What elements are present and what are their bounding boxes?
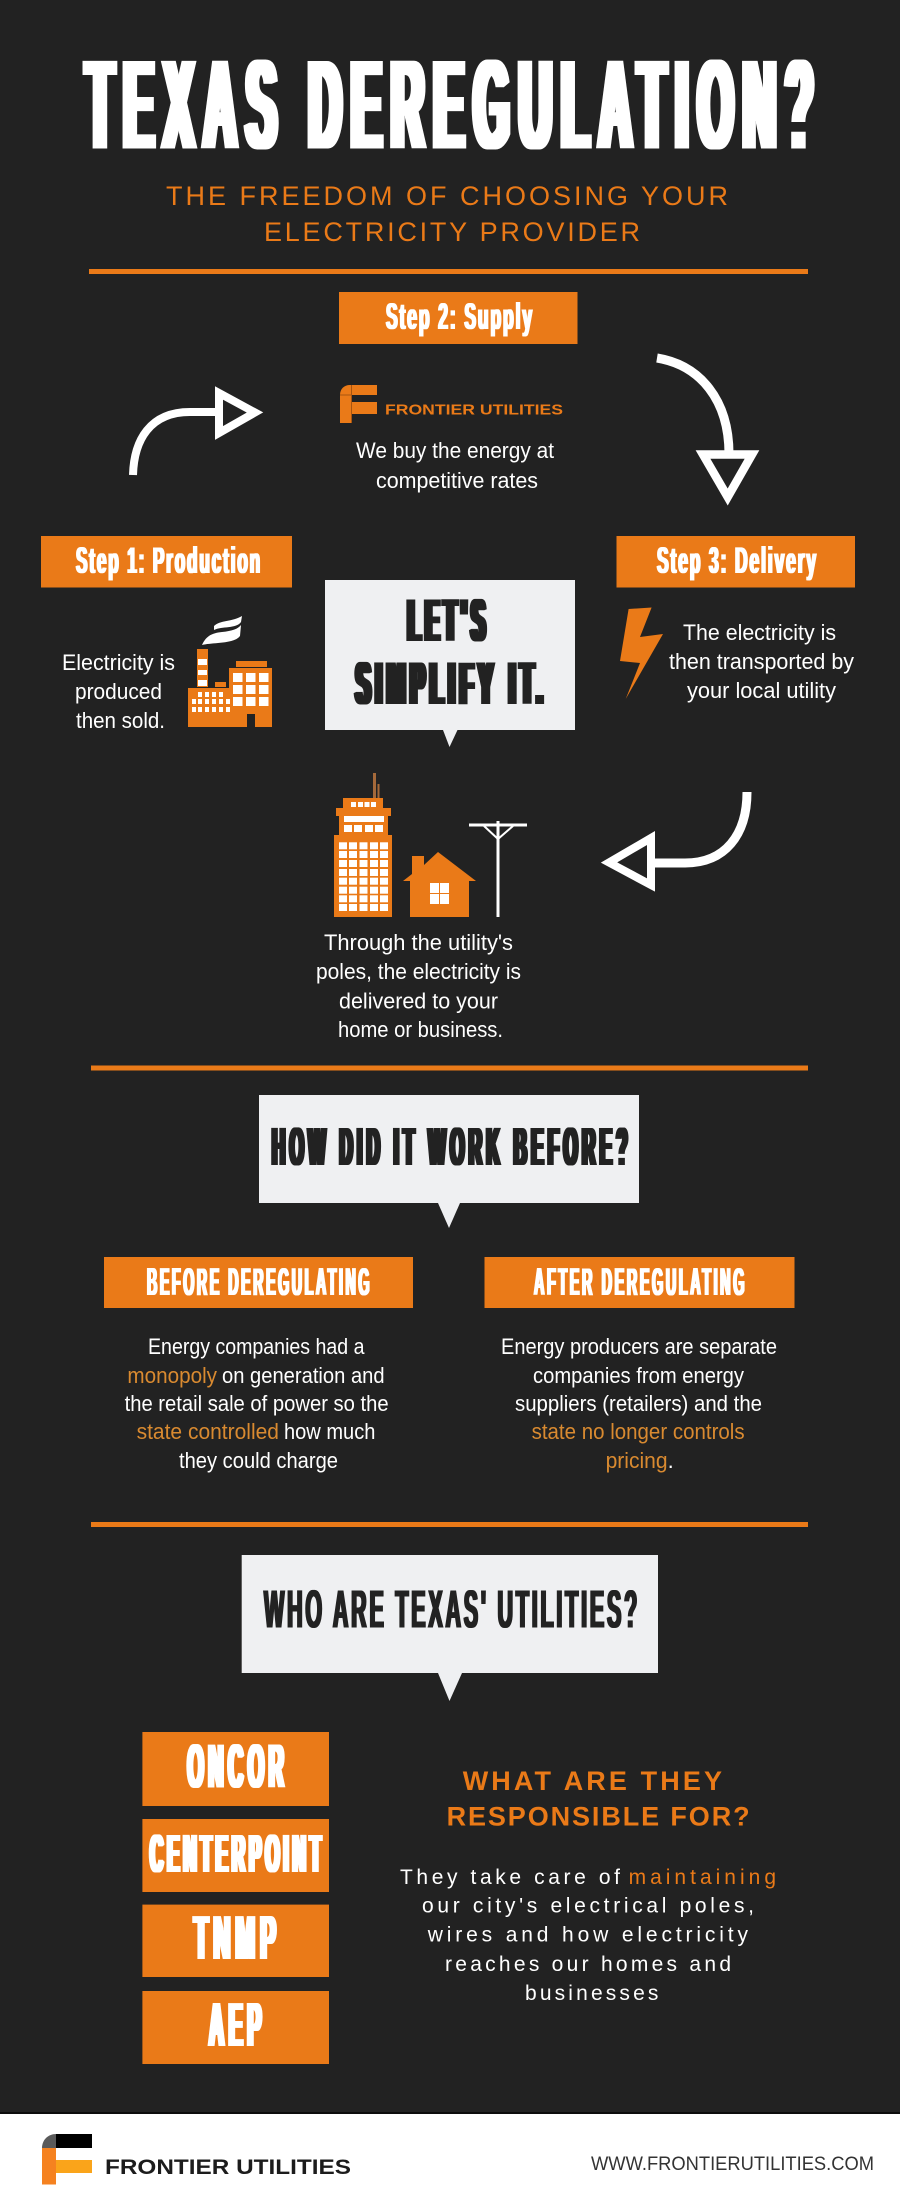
- step 2 text: We buy the energy at: [356, 438, 554, 463]
- before text: how much: [284, 1419, 375, 1444]
- callout: who are texas' utilities: [242, 1555, 658, 1701]
- responsibilities text: [400, 1866, 776, 2005]
- before text: state controlled: [137, 1419, 279, 1444]
- panel: before deregulating: [104, 1257, 413, 1473]
- centerpoint: [142, 1819, 329, 1892]
- step 2 panel: supply: [339, 292, 578, 493]
- subtitle: [166, 181, 728, 247]
- step 1 panel: production: [41, 536, 292, 733]
- step 2 label: Step 2: Supply: [386, 296, 534, 337]
- callout: how did it work before: [259, 1095, 639, 1228]
- before text: they could charge: [179, 1448, 338, 1473]
- heading: what are they responsible for: RESPONSIBLE FOR?: [447, 1802, 750, 1832]
- step 3 text: your local utility: [687, 678, 836, 703]
- arrow: production to supply: [133, 393, 255, 475]
- step 2 label: [339, 292, 578, 344]
- footer brand name: FRONTIER UTILITIES: [105, 2156, 351, 2179]
- after heading: [484, 1257, 794, 1308]
- aep: [142, 1991, 329, 2064]
- heading: what are they responsible for: WHAT ARE THEY: [463, 1766, 722, 1796]
- step 3 label: [616, 536, 855, 588]
- text: CENTERPOINT: [150, 1824, 325, 1884]
- step 3 text: then transported by: [669, 649, 854, 674]
- responsibilities text: wires and how electricity: [427, 1924, 748, 1947]
- step 1 text: produced: [75, 679, 162, 704]
- delivery text: [316, 930, 521, 1042]
- footer: [0, 2112, 900, 2200]
- text: ONCOR: [188, 1732, 288, 1802]
- after text: companies from energy: [533, 1363, 744, 1388]
- step 3 text: [669, 620, 854, 703]
- footer website: WWW.FRONTIERUTILITIES.COM: [591, 2154, 874, 2175]
- step 1 text: [62, 650, 175, 733]
- icon: tower: [334, 773, 392, 917]
- icon: frontier utilities logo orange: [340, 385, 563, 423]
- callout: let's simplify it: LET'S: [408, 587, 490, 654]
- tnmp: [142, 1904, 329, 1977]
- subtitle: ELECTRICITY PROVIDER: [264, 217, 640, 247]
- delivery text: delivered to your: [339, 988, 498, 1014]
- after text: [501, 1334, 777, 1473]
- step 1 text: then sold.: [76, 708, 165, 733]
- responsibilities text: maintaining: [629, 1866, 776, 1889]
- delivery text: Through the utility's: [324, 930, 513, 955]
- icon: factory: [188, 616, 272, 727]
- callout: let's simplify it: [325, 580, 575, 747]
- step 2 text: [356, 438, 554, 493]
- icon: frontier utilities logo: [42, 2134, 92, 2184]
- responsibilities text: businesses: [525, 1982, 658, 2005]
- panel: after deregulating: [484, 1257, 794, 1473]
- heading: what are they responsible for: [447, 1766, 750, 1832]
- after text: pricing: [606, 1448, 668, 1473]
- after text: Energy producers are separate: [501, 1334, 777, 1359]
- responsibilities text: our city's electrical poles,: [422, 1895, 754, 1918]
- before text: [125, 1334, 389, 1473]
- text: SIMPLIFY IT.: [356, 650, 548, 717]
- before text: the retail sale of power so the: [125, 1391, 389, 1416]
- icon: lightning bolt: [620, 608, 663, 699]
- panel: utility names: [142, 1732, 329, 2064]
- aep: AEP: [209, 1991, 266, 2060]
- after text: .: [668, 1448, 674, 1473]
- step 2 text: competitive rates: [376, 468, 538, 493]
- responsibilities text: They take care of: [400, 1866, 620, 1889]
- text: BEFORE DEREGULATING: [147, 1261, 372, 1304]
- icon: tower, house and utility pole: [334, 773, 527, 917]
- before text: monopoly: [127, 1363, 217, 1388]
- before text: on generation and: [222, 1363, 385, 1388]
- icon: utility pole: [469, 821, 527, 917]
- arrow: supply to delivery: [657, 358, 752, 497]
- before text: Energy companies had a: [148, 1334, 365, 1359]
- oncor: [142, 1732, 329, 1806]
- before heading: [104, 1257, 413, 1308]
- arrow: delivery to home: [609, 792, 747, 885]
- delivery text: poles, the electricity is: [316, 959, 521, 984]
- step 1 label: [41, 536, 292, 588]
- step 1 text: Electricity is: [62, 650, 175, 675]
- step 1 label: Step 1: Production: [76, 540, 262, 581]
- icon: house: [403, 852, 476, 917]
- after text: state no longer controls: [532, 1419, 745, 1444]
- delivery text: home or business.: [338, 1017, 503, 1042]
- step 3 panel: delivery: [616, 536, 855, 703]
- icon: frontier utilities logo orange: FRONTIER UTILITIES: [385, 402, 563, 418]
- after text: suppliers (retailers) and the: [515, 1391, 762, 1416]
- tnmp: TNMP: [194, 1904, 281, 1973]
- responsibilities text: reaches our homes and: [445, 1953, 731, 1976]
- subtitle: THE FREEDOM OF CHOOSING YOUR: [166, 181, 728, 211]
- step 3 text: The electricity is: [683, 620, 836, 645]
